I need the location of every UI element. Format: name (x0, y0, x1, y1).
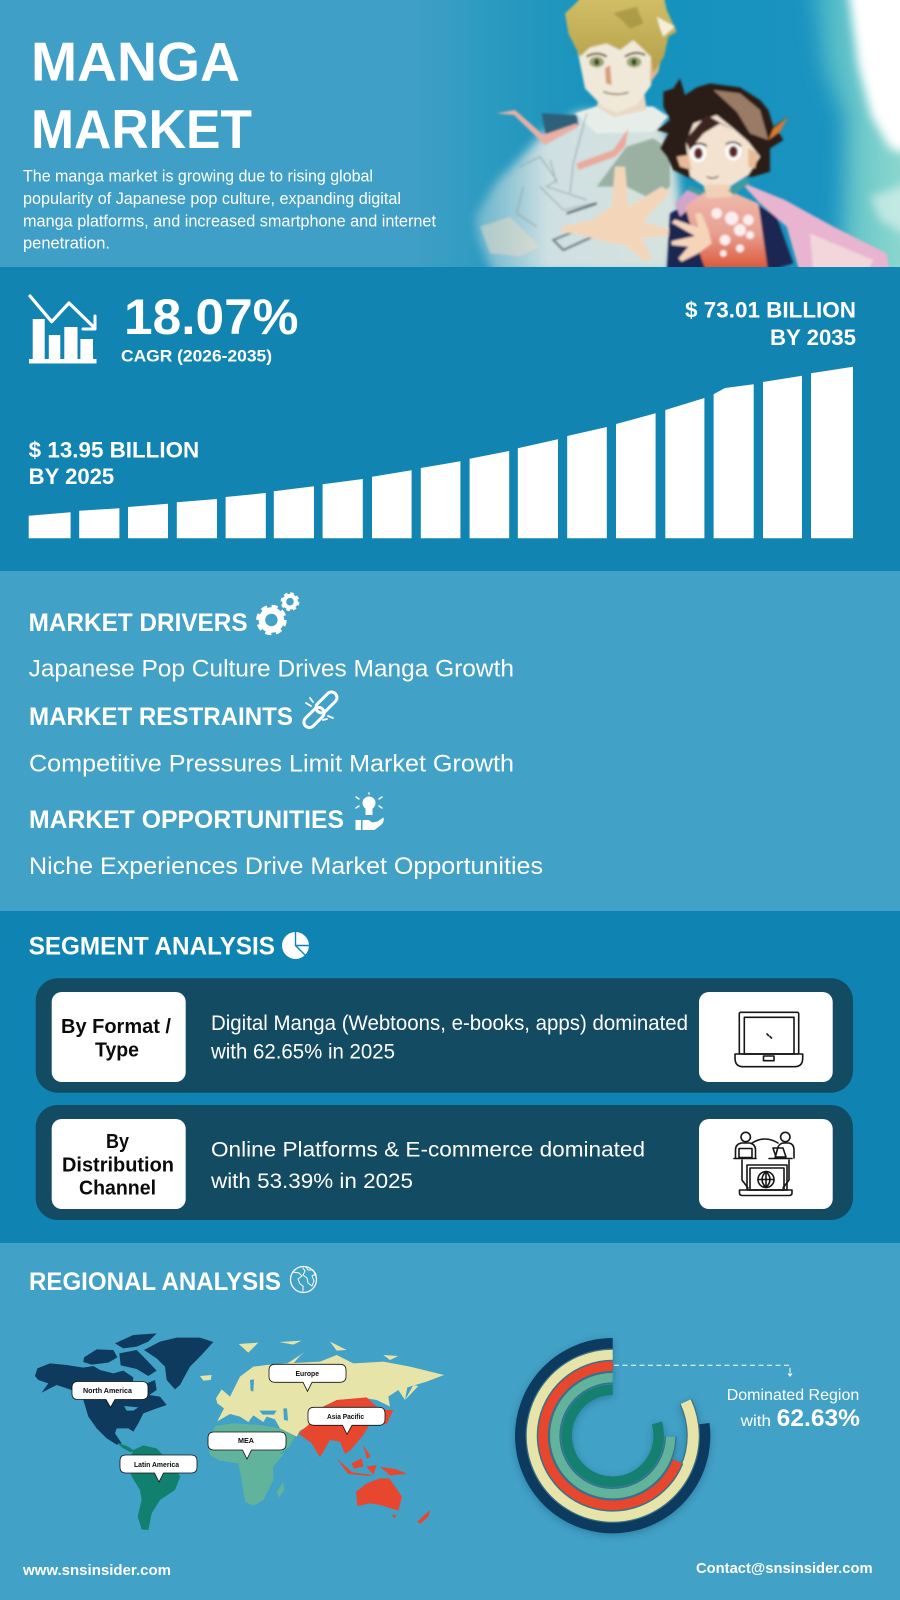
intro text: The manga market is growing due to rising global (23, 167, 373, 186)
2035 value: BY 2035 (770, 325, 856, 350)
driver text: Japanese Pop Culture Drives Manga Growth (29, 656, 514, 683)
panel: market size (0, 267, 900, 571)
title (31, 31, 252, 160)
girl hair and face (657, 78, 788, 180)
header panel (0, 0, 900, 317)
icon: online team (699, 1119, 833, 1209)
callout: dominated region: with (740, 1413, 771, 1430)
label: north america: North America (83, 1386, 133, 1395)
segment row: distribution (36, 1105, 853, 1220)
distribution description: Online Platforms & E-commerce dominated (211, 1139, 645, 1162)
bar chart (29, 367, 853, 538)
map region: asia pacific (298, 1397, 430, 1524)
map region: middle east and africa (208, 1423, 295, 1506)
intro text: popularity of Japanese pop culture, expanding digital (23, 189, 401, 208)
panel: regional analysis (0, 1243, 900, 1600)
label: latin america: Latin America (134, 1460, 180, 1469)
label: europe (269, 1364, 346, 1391)
distribution description: with 53.39% in 2025 (210, 1170, 413, 1193)
label: asia pacific (308, 1407, 385, 1434)
2035 value: $ 73.01 BILLION (685, 298, 856, 323)
label box: by distribution: Channel (79, 1177, 156, 1199)
2035 value (685, 298, 856, 350)
callout: dominated region: Dominated Region (727, 1387, 859, 1404)
label box: by distribution (52, 1119, 186, 1209)
intro text (23, 167, 436, 252)
label: asia pacific: Asia Pacific (327, 1412, 364, 1421)
illustration: manga characters (471, 0, 900, 267)
format description: with 62.65% in 2025 (210, 1040, 395, 1063)
2025 value (29, 438, 199, 489)
label box: by format: By Format / (61, 1016, 171, 1038)
footer: website: www.snsinsider.com (22, 1562, 171, 1579)
panel: segment analysis (0, 911, 900, 1243)
CAGR value (121, 289, 298, 366)
map: world regions (35, 1333, 444, 1530)
label: europe: Europe (296, 1369, 319, 1378)
boy neck and face (596, 94, 648, 118)
boy hand (562, 167, 672, 262)
heading: market drivers: MARKET DRIVERS (29, 609, 248, 637)
label box: by distribution: Distribution (62, 1155, 174, 1177)
callout: dominated region: 62.63% (777, 1405, 860, 1432)
heading: market opportunities: MARKET OPPORTUNITIES (29, 806, 344, 834)
girl cape and dress (667, 200, 707, 273)
heading: market restraints: MARKET RESTRAINTS (29, 703, 293, 731)
title: MARKET (31, 98, 252, 160)
label box: by distribution: By (106, 1131, 130, 1153)
icon: pie chart (282, 932, 309, 959)
boy body (475, 112, 682, 273)
opportunity text: Niche Experiences Drive Market Opportunities (29, 853, 543, 880)
map region: europe and north asia (200, 1341, 444, 1437)
panel: market dynamics (0, 571, 900, 911)
boy hair (565, 0, 677, 73)
map region: north america (35, 1333, 213, 1445)
map region: latin america (117, 1443, 180, 1530)
restraint text: Competitive Pressures Limit Market Growth (29, 751, 514, 778)
title: MANGA (31, 31, 240, 93)
label box: by format (52, 992, 186, 1082)
label: north america (72, 1382, 148, 1408)
icon: chart trend (29, 296, 96, 364)
CAGR value: CAGR (2026-2035) (121, 347, 272, 366)
intro text: penetration. (23, 233, 110, 252)
format description: Digital Manga (Webtoons, e-books, apps) dominated (211, 1012, 688, 1035)
2025 value: $ 13.95 BILLION (29, 438, 199, 463)
label box: by format: Type (95, 1040, 139, 1062)
CAGR value: 18.07% (124, 289, 298, 345)
label: mea (208, 1432, 286, 1459)
icon: idea in hand (356, 793, 384, 830)
icon: laptop (699, 992, 833, 1082)
arrow: dashed callout line (614, 1365, 792, 1377)
heading: regional analysis: REGIONAL ANALYSIS (29, 1268, 281, 1296)
girl hand (672, 213, 712, 262)
footer: contact: Contact@snsinsider.com (696, 1560, 873, 1577)
callout: dominated region (727, 1387, 860, 1432)
distribution description (210, 1139, 645, 1193)
segment row: format (36, 978, 853, 1093)
icon: globe (290, 1266, 316, 1292)
intro text: manga platforms, and increased smartphone and internet (23, 212, 436, 231)
chart: radial regional share (520, 1343, 705, 1528)
label: mea: MEA (238, 1436, 255, 1445)
label: latin america (120, 1455, 197, 1482)
icon: broken chain (302, 690, 339, 730)
icon: gears (258, 594, 298, 634)
format description (210, 1012, 688, 1063)
heading: segment analysis: SEGMENT ANALYSIS (29, 932, 275, 960)
2025 value: BY 2025 (29, 464, 114, 489)
